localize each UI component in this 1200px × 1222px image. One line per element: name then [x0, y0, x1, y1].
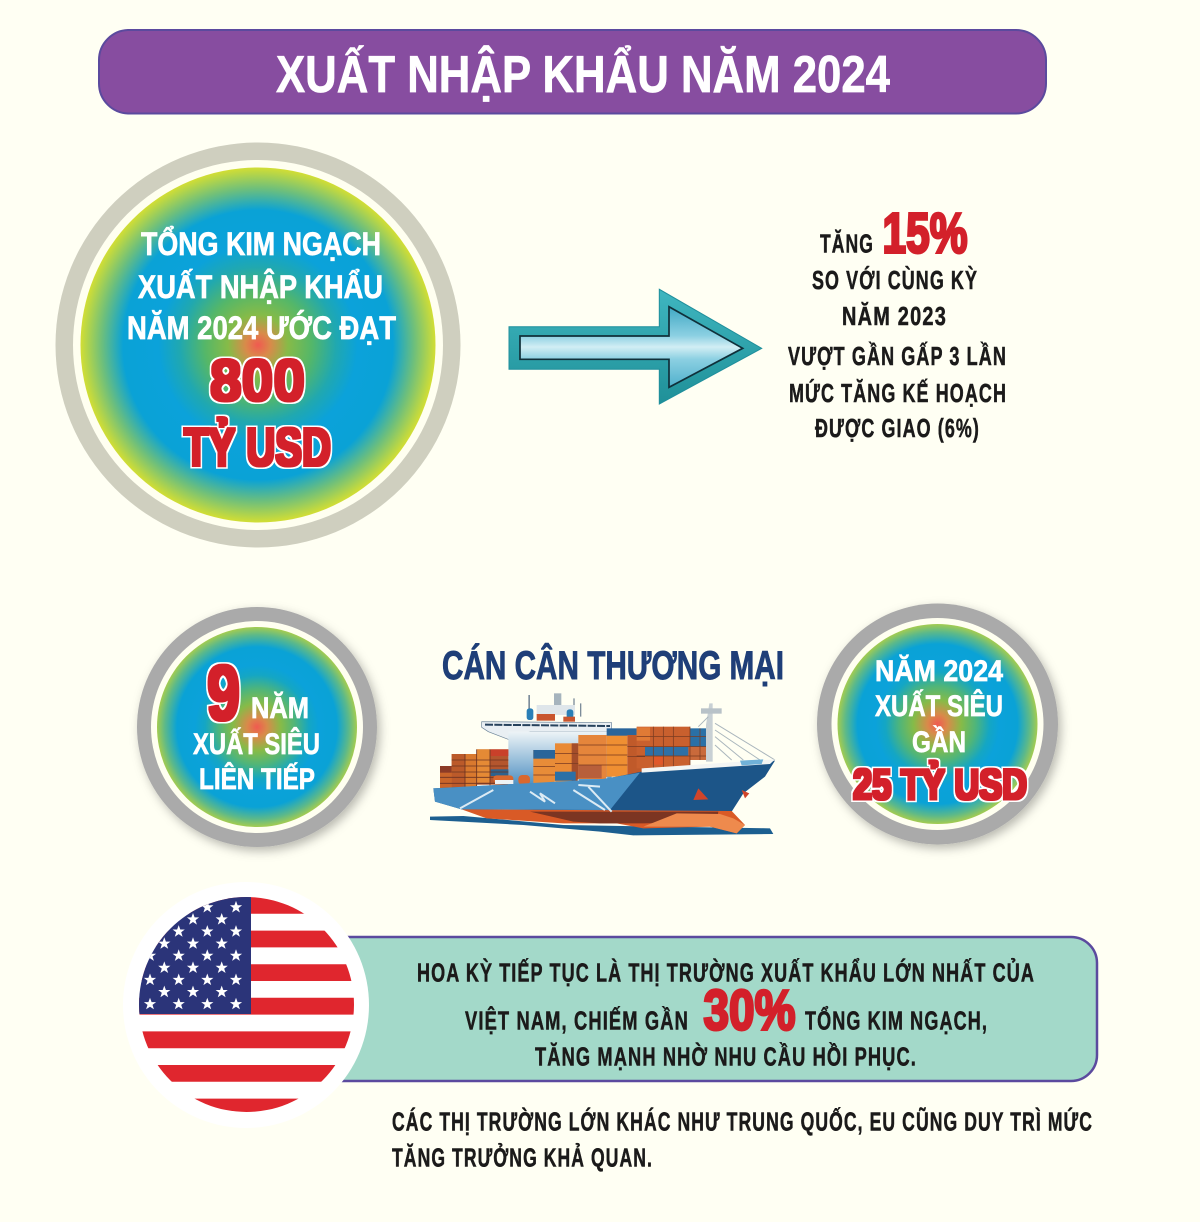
value: 800 billion USD: TỶ USD: [184, 418, 331, 478]
value: 15 percent: 15%: [882, 202, 968, 266]
text block: other markets: TĂNG TRƯỞNG KHẢ QUAN.: [392, 1142, 653, 1172]
icon: container ship: [430, 693, 775, 835]
title banner: [99, 30, 1046, 114]
panel: trade surplus circle: [817, 604, 1058, 844]
text block: growth: MỨC TĂNG KẾ HOẠCH: [789, 378, 1007, 408]
text block: growth: SO VỚI CÙNG KỲ: [812, 265, 978, 295]
value: 800 billion USD: 800: [210, 348, 305, 414]
value: 25 billion USD: 25 TỶ USD: [853, 760, 1027, 809]
mast and stays: [698, 703, 775, 762]
panel: trade surplus circle: XUẤT SIÊU: [875, 689, 1003, 723]
value: 9: 9: [207, 648, 240, 736]
panel: US market callout: TỔNG KIM NGẠCH,: [805, 1006, 988, 1036]
value: 800 billion USD: [184, 348, 331, 478]
panel: nine years circle: XUẤT SIÊU: [193, 727, 320, 761]
bridge: [528, 695, 581, 717]
water: [430, 816, 773, 835]
panel: total trade circle: [56, 142, 460, 548]
aft containers: [440, 749, 530, 789]
text block: growth: VƯỢT GẦN GẤP 3 LẦN: [788, 341, 1007, 371]
value: 30 percent: 30%: [704, 978, 796, 1042]
text block: growth: [788, 202, 1007, 443]
heading: trade balance: CÁN CÂN THƯƠNG MẠI: [442, 642, 784, 688]
text block: growth: NĂM 2023: [842, 301, 947, 331]
panel: total trade circle: TỔNG KIM NGẠCH: [141, 226, 381, 262]
anchors: [693, 788, 749, 800]
arrow: [509, 289, 762, 404]
panel: nine years circle: NĂM: [251, 691, 309, 725]
panel: US market callout: [300, 937, 1097, 1081]
text block: growth: TĂNG: [820, 228, 874, 258]
panel: trade surplus circle: GẦN: [912, 725, 966, 759]
panel: total trade circle: XUẤT NHẬP KHẨU: [138, 269, 383, 305]
panel: trade surplus circle: NĂM 2024: [875, 654, 1003, 688]
title banner: XUẤT NHẬP KHẨU NĂM 2024: [276, 45, 890, 104]
hull: [433, 761, 775, 812]
panel: US market callout: TĂNG MẠNH NHỜ NHU CẦU HỒI PHỤC.: [535, 1042, 917, 1072]
panel: total trade circle: NĂM 2024 ƯỚC ĐẠT: [127, 310, 396, 346]
text block: other markets: [392, 1106, 1093, 1172]
icon: US flag: [123, 882, 369, 1128]
panel: nine years circle: LIÊN TIẾP: [199, 762, 315, 796]
text block: growth: ĐƯỢC GIAO (6%): [815, 413, 980, 443]
panel: nine years circle: [137, 607, 377, 847]
fore containers: [533, 727, 708, 790]
panel: US market callout: VIỆT NAM, CHIẾM GẦN: [465, 1006, 689, 1036]
